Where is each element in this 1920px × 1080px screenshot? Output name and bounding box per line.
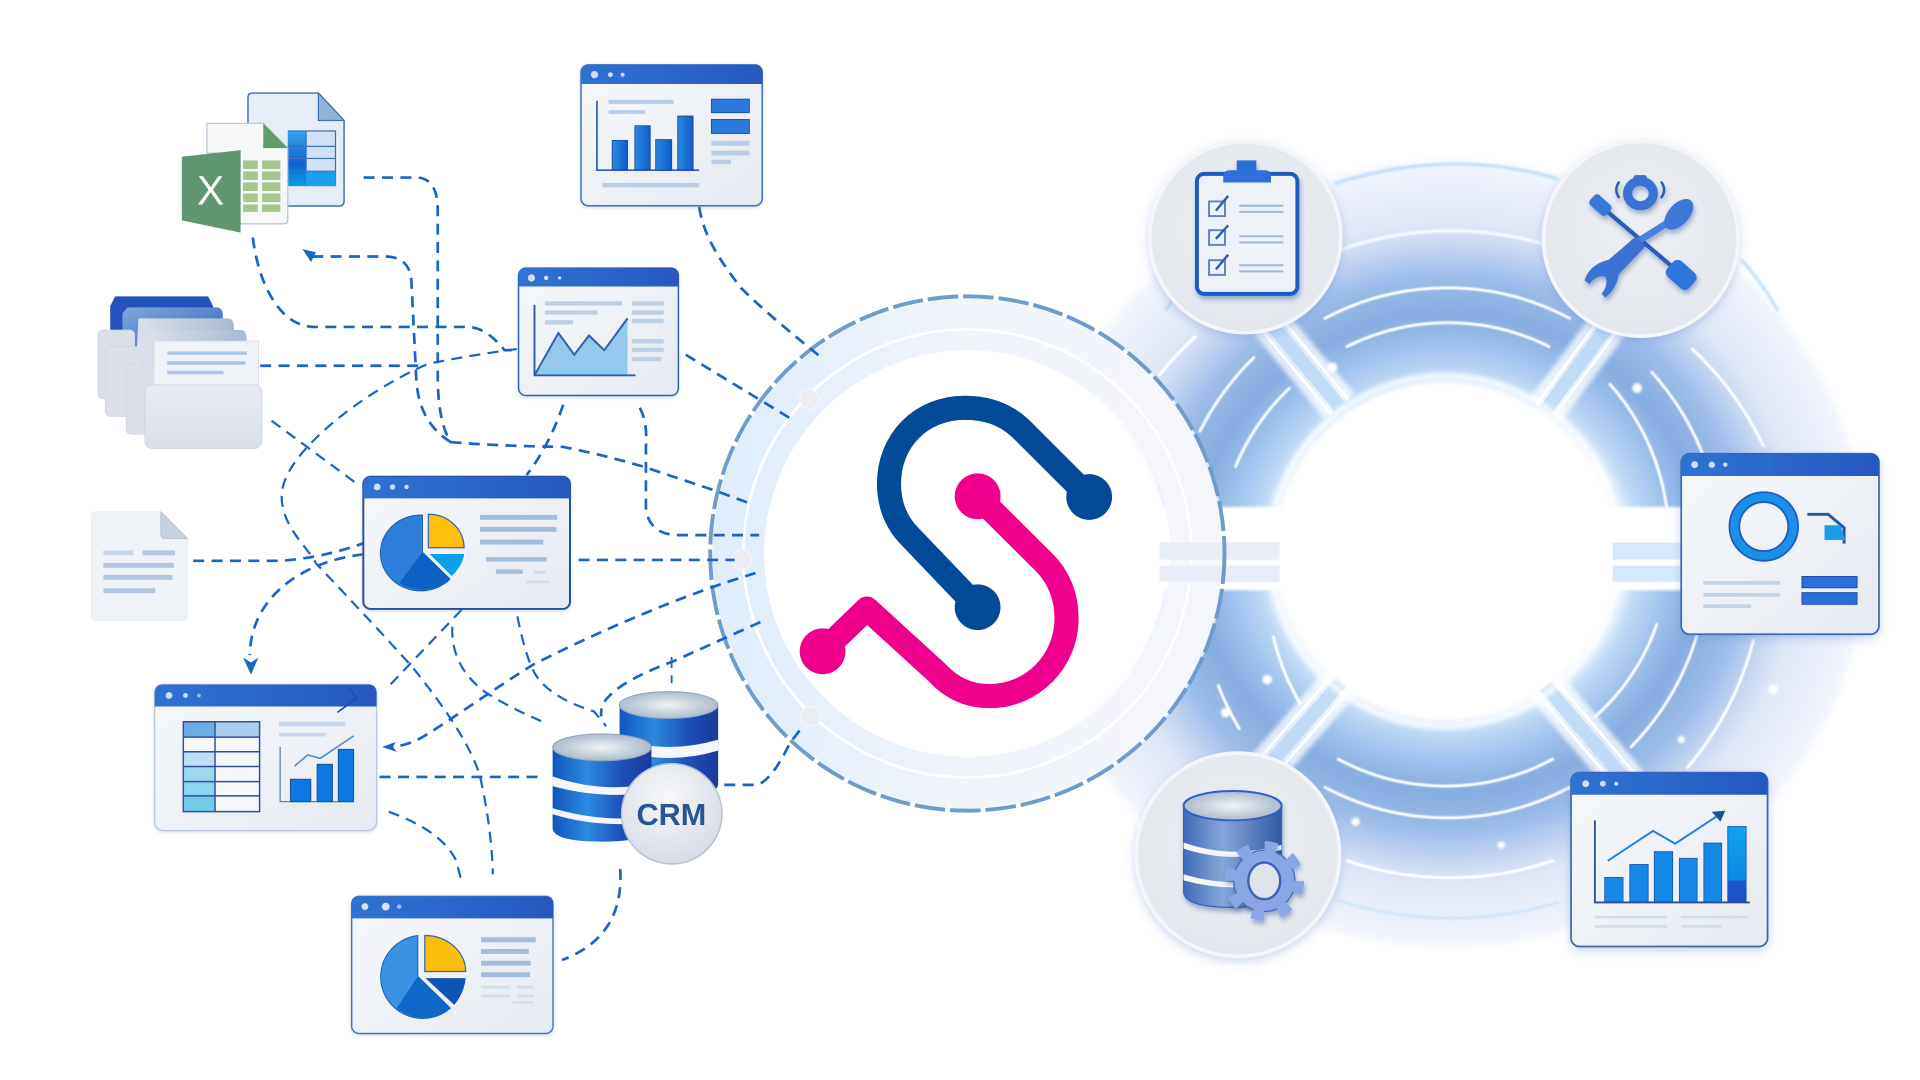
gear: [1230, 847, 1299, 915]
connector: hub to table window: [389, 573, 756, 747]
connector: pie window to lower left: [390, 610, 462, 685]
connector: line window bottom to hub: [640, 408, 759, 535]
nut: [1616, 175, 1664, 206]
panel: lower pie window: [352, 896, 553, 1033]
white energy arcs: [1160, 231, 1763, 918]
badge: database gear: [1136, 753, 1340, 956]
glowing segmented ring: [1026, 156, 1871, 951]
text lines: [481, 937, 536, 977]
connector: top window to hub: [699, 207, 823, 359]
connector: pie window to table window: [250, 554, 363, 655]
faint text lines: [481, 986, 534, 1004]
text lines: [279, 722, 345, 726]
text lines: [1703, 581, 1780, 608]
back cylinder: [619, 692, 718, 797]
green sheet: [207, 123, 288, 224]
text lines: [545, 301, 664, 361]
bars: [1605, 827, 1746, 902]
panel: ring window right: [1681, 454, 1879, 634]
connector: CRM to lower pie: [562, 869, 620, 960]
logo: [800, 408, 1112, 696]
disc: [1136, 753, 1340, 956]
halo band: [738, 324, 1196, 782]
folder pages: [136, 318, 234, 367]
connector: pie window to hub: [579, 559, 735, 561]
node dots: [732, 389, 820, 726]
icon: spreadsheets: [182, 93, 344, 233]
connector: short vertical: [671, 657, 673, 683]
icon: folders: [98, 296, 262, 448]
crossed tools: [1584, 175, 1699, 298]
pie chart: [381, 936, 466, 1018]
mini bar chart: [280, 736, 354, 802]
panel: line chart window: [519, 268, 678, 396]
panel: pie chart window: [363, 477, 570, 609]
CRM badge: [622, 764, 722, 864]
chart axis: [597, 101, 699, 170]
axes: [1595, 820, 1750, 902]
folder back pockets: [98, 330, 163, 434]
trend arrowhead: [1712, 811, 1725, 822]
central hub disc: [710, 296, 1280, 811]
folder back tabs: [110, 296, 213, 343]
connector: line window to hub: [686, 355, 792, 420]
ring body: [1026, 156, 1871, 951]
database cylinder: [1184, 791, 1282, 907]
dashed connectors: [193, 178, 823, 960]
text lines: [602, 100, 749, 187]
arrowheads: [243, 249, 397, 752]
bars: [612, 116, 693, 170]
arrowhead: into table window right: [382, 742, 397, 752]
connector: folders to right: [260, 365, 422, 367]
paper sheet: [154, 341, 259, 390]
arrowhead: into spreadsheet: [302, 249, 316, 262]
disc: [1150, 142, 1341, 333]
badge: tools: [1543, 141, 1738, 336]
pie chart: [380, 514, 465, 591]
side buttons: [711, 99, 749, 133]
connector: table window to lower pie: [389, 812, 462, 884]
text lines: [480, 515, 557, 583]
data table: [183, 722, 260, 812]
caption line: [279, 733, 325, 737]
footer lines: [1595, 916, 1749, 928]
ring graphic: [1734, 497, 1793, 556]
connector: pie window to CRM top: [517, 616, 606, 726]
clipboard: [1197, 160, 1297, 294]
logo navy stroke: [889, 408, 1112, 630]
spout graphic: [1807, 514, 1845, 544]
ring top rim highlight: [1166, 164, 1778, 311]
connector: CRM to hub: [724, 727, 802, 785]
connector: line window long curve: [282, 349, 517, 874]
front cylinder: [553, 734, 651, 842]
screwdriver: [1588, 193, 1699, 292]
CRM badge: CRM: [637, 798, 706, 832]
connector: line window to pie window: [527, 405, 563, 475]
buttons: [1802, 576, 1857, 604]
icon: document: [92, 512, 187, 621]
excel badge: X: [197, 167, 224, 213]
badge: clipboard: [1150, 142, 1341, 333]
trend arrow: [1608, 816, 1718, 861]
diagonal spokes: [1253, 300, 1637, 791]
panel: bar chart window: [581, 65, 762, 206]
connector: blue sheet to hub: [364, 178, 749, 503]
icon: CRM databases: [553, 692, 722, 864]
connector: pie window to database: [452, 627, 547, 723]
header chevron: [337, 688, 357, 712]
horizontal spokes: [1160, 507, 1685, 590]
folded corner: [161, 512, 187, 538]
connector: spreadsheet to line window: [253, 238, 517, 350]
front folder: [145, 385, 262, 448]
area chart: [534, 318, 628, 375]
connector: folders to pie window: [272, 421, 356, 483]
logo pink stroke: [800, 473, 1067, 696]
panel: growth chart window: [1571, 773, 1768, 947]
wrench: [1584, 194, 1699, 298]
ring centre hole: [1276, 382, 1614, 720]
panel: table and chart window: [155, 684, 377, 831]
sparkles: [1221, 362, 1778, 849]
blue sheet: [248, 93, 344, 206]
dashed hub border: [710, 296, 1224, 811]
hole glow: [1270, 376, 1620, 726]
disc: [1543, 141, 1738, 336]
inner halo line: [743, 329, 1191, 778]
text lines: [103, 550, 175, 593]
connector: hub to CRM: [601, 622, 760, 716]
excel badge: [182, 150, 241, 233]
area chart line and axes: [534, 305, 636, 375]
arrowhead: into table window: [243, 658, 258, 675]
translucent disc: [710, 296, 1224, 811]
hub stripes: [1160, 542, 1280, 582]
inner white core: [767, 353, 1168, 754]
connector: table window to CRM: [380, 776, 541, 778]
connector: document to pie window: [193, 543, 363, 561]
connector: arrow into spreadsheets: [312, 257, 451, 442]
checklist: [1209, 196, 1283, 275]
